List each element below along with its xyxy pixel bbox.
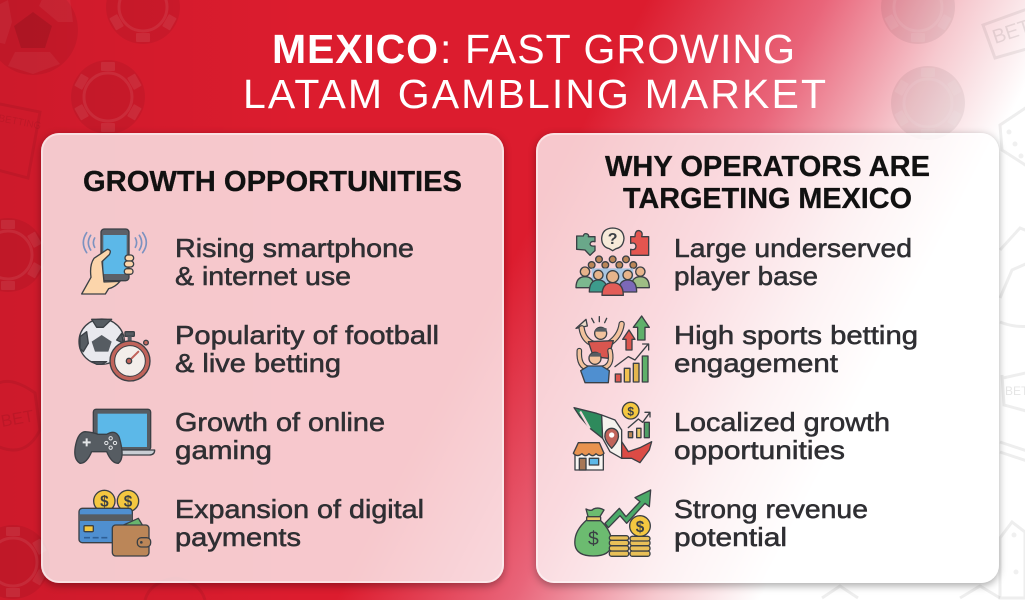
watermark: chip top right [881,0,955,44]
watermark: chip right [891,66,965,140]
text: localized growth: opportunities [674,435,845,465]
text: rising smartphone [175,233,414,291]
text: large underserved: player base [674,261,818,291]
text: strong revenue: Strong revenue [674,494,868,524]
text: localized growth: Localized growth [674,407,890,437]
panel shadows [41,135,999,586]
icon: fans and growth arrows [576,316,649,383]
title [243,26,826,117]
text: high sports betting: High sports betting [674,320,918,350]
icon: money bag and rising arrow: $ [588,529,599,550]
watermark: dice top right [1000,105,1025,168]
heading: why operators: WHY OPERATORS ARE [605,151,930,183]
text: rising smartphone: & internet use [175,261,351,291]
icon: card, coins and wallet: $ [124,494,133,511]
icon: card, coins and wallet: $ [100,494,109,511]
text: growth of online gaming [175,407,385,465]
watermark: bet ticket top right [983,8,1025,58]
text: popularity of football [175,320,439,378]
text: growth of online gaming: gaming [175,435,272,465]
text: expansion of digital payments: Expansion of digital [175,494,424,524]
text: popularity of football: & live betting [175,348,341,378]
watermark: soccer ball bottom [145,578,205,600]
icon: football and stopwatch [79,319,150,381]
icon: smartphone in hand [82,229,146,294]
text: large underserved [674,233,912,291]
panel: growth opportunities [41,133,504,583]
title: MEXICO [272,26,438,72]
icon: puzzle pieces and crowd: ? [608,231,618,248]
watermark: chip bottom left [0,525,50,599]
text: expansion of digital payments [175,494,424,552]
icon: card, coins and wallet [79,490,151,556]
watermark: bet ticket right [1000,372,1025,462]
watermark: dice bottom right [1000,522,1025,598]
text: localized growth [674,407,890,465]
heading: growth opportunities: GROWTH OPPORTUNITIES [83,166,462,198]
watermark: bet ticket left: BET [0,406,35,431]
icon: laptop and game controller [75,409,155,463]
text: large underserved: Large underserved [674,233,912,263]
text: expansion of digital payments: payments [175,522,301,552]
text: high sports betting [674,320,918,378]
text: growth of online gaming: Growth of online [175,407,385,437]
text: strong revenue [674,494,868,552]
watermark: betting slip [0,102,42,178]
watermark: dice right [1000,228,1025,326]
title: LATAM GAMBLING MARKET [243,71,826,117]
watermark: chip upper left [71,60,145,134]
heading: why operators [605,151,930,215]
text: popularity of football: Popularity of football [175,320,439,350]
title: : FAST GROWING [440,26,795,72]
text: rising smartphone: Rising smartphone [175,233,414,263]
icon: money bag and rising arrow [575,490,651,556]
icon: mexico map with store: $ [627,405,634,419]
icon: puzzle pieces and crowd [576,228,649,295]
text: high sports betting: engagement [674,348,839,378]
watermark: chip left edge [0,218,45,292]
watermark: chip top [106,0,180,44]
icon: money bag and rising arrow: $ [636,519,645,536]
icon: mexico map with store [573,402,652,470]
panel: why operators are targeting mexico [536,133,999,583]
watermark: dice bottom [822,586,1000,598]
watermark: soccer ball top left [0,0,78,75]
heading: why operators: TARGETING MEXICO [623,183,912,215]
text: strong revenue: potential [674,522,787,552]
watermark: bet ticket left [0,381,40,450]
